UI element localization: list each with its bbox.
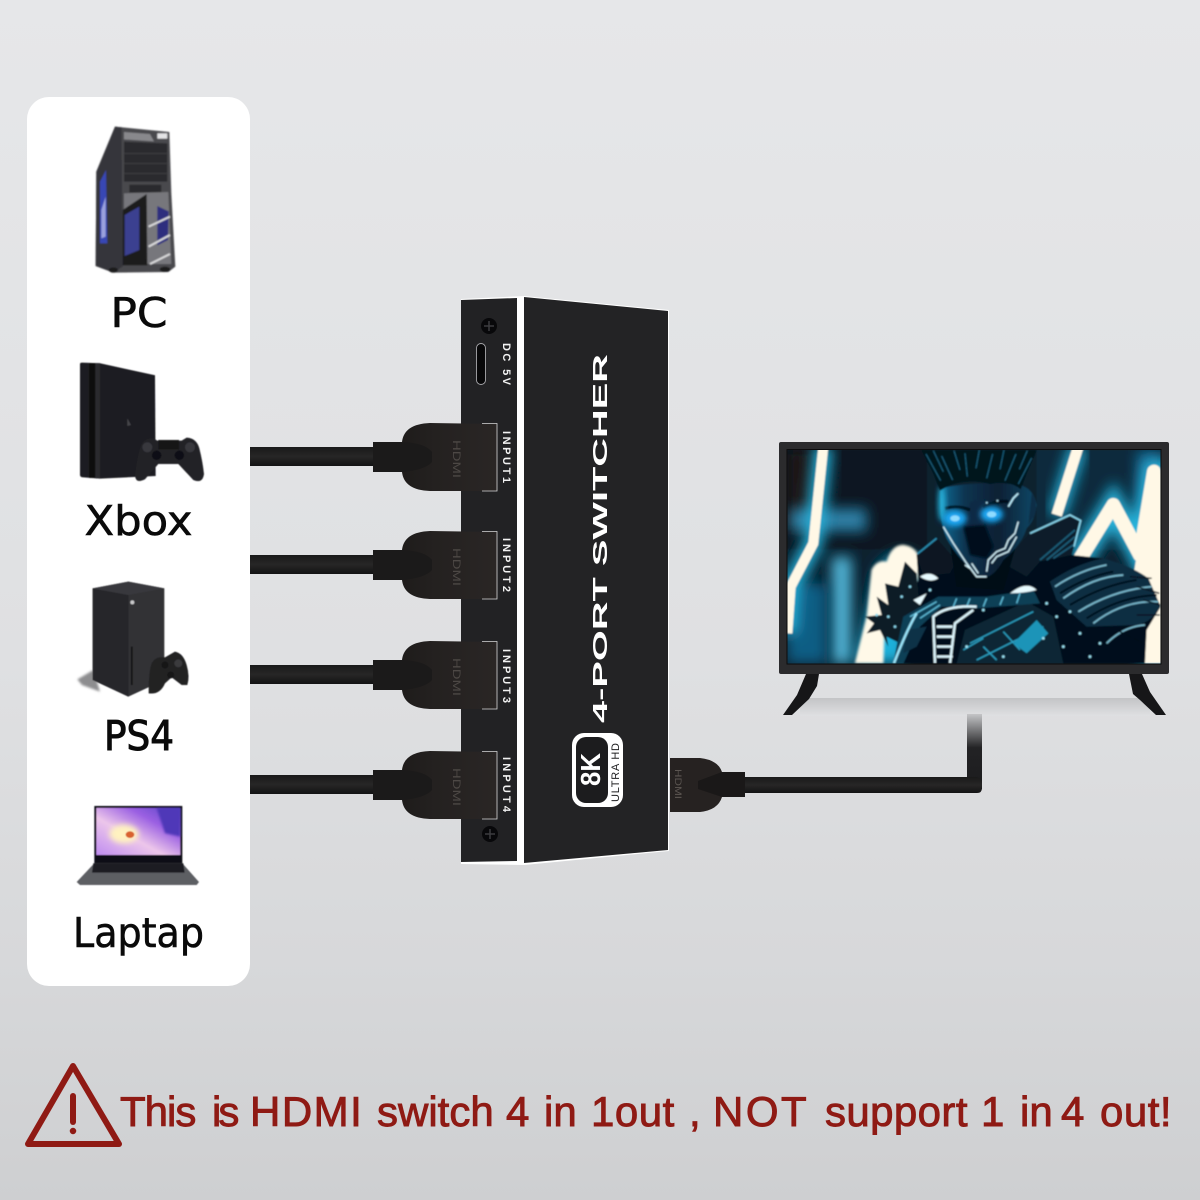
- label: PC: PC: [110, 289, 168, 337]
- warning text: HDMI: [250, 1088, 363, 1135]
- label: INPUT1: INPUT1: [500, 431, 512, 483]
- label: INPUT2: INPUT2: [500, 538, 512, 592]
- warning text: 4: [506, 1088, 529, 1135]
- HDMI output cable: HDMI: [673, 769, 683, 799]
- icon: warning triangle: [28, 1066, 119, 1144]
- chest armour: [957, 602, 1063, 664]
- TV frame: [779, 442, 1169, 674]
- warning text: 4: [1061, 1088, 1084, 1135]
- HDMI input cable 2: [250, 531, 497, 599]
- panel: port side: [461, 298, 517, 862]
- badge: 8K Ultra HD: [572, 733, 623, 807]
- label: INPUT3: INPUT3: [500, 649, 512, 703]
- icon: screw top: [481, 318, 497, 334]
- warning text: 1out: [591, 1088, 675, 1135]
- icon: screw bottom: [482, 826, 498, 842]
- label: Laptap: Laptap: [73, 909, 204, 957]
- HDMI input cable 2: HDMI: [450, 548, 462, 586]
- label: INPUT4: INPUT4: [500, 757, 512, 813]
- panel: source devices: [27, 97, 250, 986]
- warning: [28, 1066, 1172, 1144]
- badge: 8K Ultra HD: 8K: [575, 753, 606, 786]
- left shoulder and spikes: [865, 562, 920, 647]
- warning text: NOT: [713, 1088, 809, 1135]
- right collar: [1010, 518, 1078, 577]
- face: [940, 483, 1037, 577]
- TV shelf reflection: [800, 698, 1150, 716]
- TV screen inner edge: [787, 450, 1161, 664]
- HDMI input cable 1: [250, 423, 497, 491]
- TV stand right: [1129, 674, 1166, 715]
- TV screen artwork: [787, 447, 1161, 664]
- warning text: support: [825, 1088, 968, 1135]
- HDMI input cable 4: HDMI: [450, 768, 462, 806]
- face circuit lines: [943, 527, 987, 577]
- warning text: 1: [981, 1088, 1004, 1135]
- icon: console with gamepad (tower): [77, 582, 189, 697]
- HDMI input cable 1: HDMI: [450, 440, 462, 478]
- chest neon strip: [933, 606, 977, 663]
- warning text: is: [212, 1088, 238, 1135]
- HDMI input cable 3: [250, 641, 497, 709]
- label: DC 5V: DC 5V: [500, 343, 512, 386]
- label: 4-PORT SWITCHER: 4-PORT SWITCHER: [589, 354, 612, 723]
- badge: 8K Ultra HD: ULTRA HD: [610, 743, 622, 802]
- icon: PC tower: [96, 127, 175, 273]
- icon: console with gamepad (black slim): [80, 363, 204, 481]
- HDMI output cable: [670, 714, 982, 812]
- warning text: ,: [689, 1088, 701, 1135]
- label: Xbox: Xbox: [84, 497, 192, 545]
- warning text: in: [1020, 1088, 1053, 1135]
- warning text: in: [544, 1088, 577, 1135]
- warning text: switch: [377, 1088, 494, 1135]
- label: PS4: PS4: [104, 712, 174, 760]
- TV: [779, 442, 1169, 715]
- figure body: [894, 538, 1160, 664]
- eyes: [944, 510, 966, 526]
- HDMI input cable 3: HDMI: [450, 658, 462, 696]
- HDMI input cable 4: [250, 751, 497, 819]
- switcher device: [461, 296, 669, 865]
- panel: top face: [524, 297, 668, 863]
- neck: [950, 546, 1015, 578]
- warning text: This: [120, 1088, 195, 1135]
- left collar: [918, 540, 954, 576]
- icon: laptop: [77, 806, 199, 885]
- hair: [922, 450, 1037, 491]
- TV stand left: [783, 674, 819, 715]
- icon: USB-C port: [476, 344, 486, 384]
- warning text: out!: [1100, 1088, 1172, 1135]
- device white edge: [461, 296, 669, 865]
- right shoulder armour: [1050, 558, 1161, 627]
